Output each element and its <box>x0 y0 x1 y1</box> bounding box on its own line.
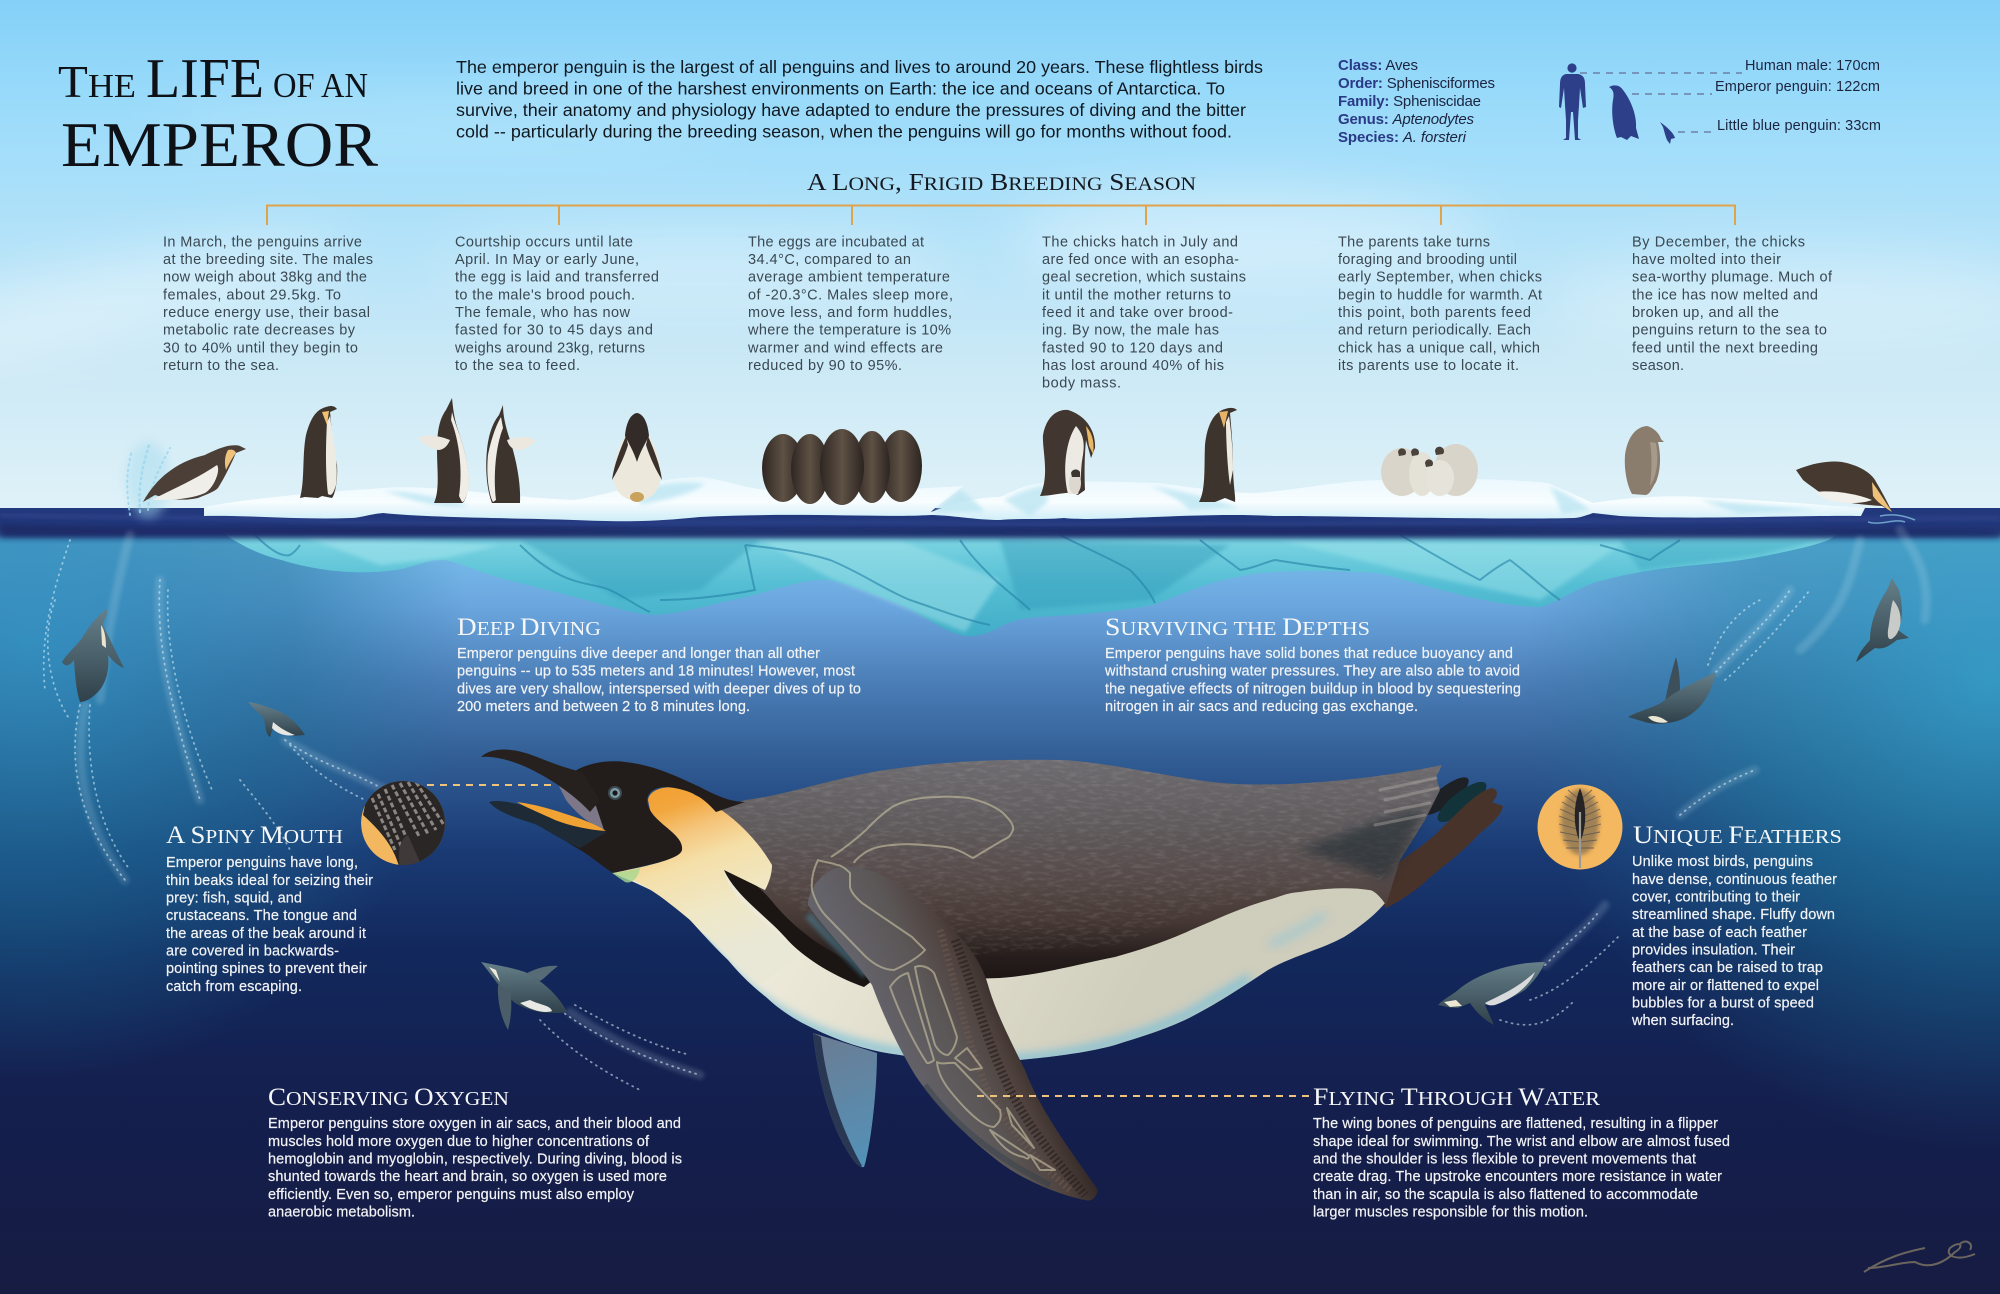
section: conserving oxygen: hemoglobin and myoglobin, respectively. During diving, blood is <box>268 1152 682 1168</box>
timeline text: March: In March, the penguins arrive <box>163 234 362 250</box>
height comparison chart <box>1559 58 1881 144</box>
timeline text: incubation <box>747 234 953 374</box>
background: clouds <box>0 94 2000 383</box>
intro text <box>456 57 1263 142</box>
dark water band at surface <box>0 500 2000 537</box>
back plumage <box>716 760 1442 982</box>
belly <box>613 860 1385 1062</box>
head <box>537 761 745 873</box>
section: conserving oxygen: CONSERVING OXYGEN <box>268 1084 509 1111</box>
penguin: incubating egg front view <box>612 413 662 502</box>
penguin chicks huddling <box>1381 444 1478 496</box>
bubble trails <box>44 530 1926 1090</box>
icon: feather detail circle <box>1538 784 1622 870</box>
timeline text: September: early September, when chicks <box>1338 270 1542 286</box>
iceberg cracks <box>255 535 1680 625</box>
penguin: courting pair left <box>418 398 469 503</box>
timeline text: July hatching: feed it and take over brood- <box>1042 305 1233 321</box>
timeline text: April to June: April. In May or early June, <box>455 252 639 268</box>
leader: flipper <box>977 1095 1310 1097</box>
penguin: standing male <box>300 406 337 498</box>
section: unique feathers: streamlined shape. Fluffy down <box>1632 907 1835 923</box>
chest and neck patch <box>613 787 800 985</box>
timeline text: December: penguins return to the sea to <box>1632 323 1827 339</box>
eye <box>608 786 622 800</box>
icon: human silhouette <box>1559 63 1586 140</box>
intro text: The emperor penguin is the largest of all penguins and lives to around 20 years. These flightless birds <box>456 57 1263 77</box>
timeline text: incubation: move less, and form huddles, <box>748 305 952 321</box>
timeline text: December: By December, the chicks <box>1632 234 1805 250</box>
timeline text: July hatching: geal secretion, which sustains <box>1042 270 1246 286</box>
swimming penguin: small left <box>248 702 305 737</box>
timeline text: incubation: where the temperature is 10% <box>747 323 951 339</box>
section: surviving the depths: withstand crushing water pressures. They are also able to avoid <box>1104 664 1520 680</box>
tail feather highlights <box>1375 778 1438 825</box>
timeline text: April to June: to the sea to feed. <box>455 358 580 374</box>
section: surviving the depths: the negative effects of nitrogen buildup in blood by sequestering <box>1105 681 1521 697</box>
icon: mouth spines detail circle <box>361 781 445 865</box>
section: deep diving: Emperor penguins dive deeper and longer than all other <box>457 646 820 662</box>
taxonomy list <box>1338 57 1495 146</box>
section: a spiny mouth: thin beaks ideal for seizing their <box>166 873 373 889</box>
timeline text: September: its parents use to locate it. <box>1338 358 1519 374</box>
taxonomy list: Species: A. forsteri <box>1338 129 1467 146</box>
leader: mouth <box>427 784 552 786</box>
height dashed leaders <box>1580 73 1742 132</box>
background: sky <box>0 0 2000 520</box>
title: EMPEROR <box>61 109 378 180</box>
timeline text: September: this point, both parents feed <box>1338 305 1531 321</box>
timeline text: April to June <box>454 234 659 374</box>
timeline text: July hatching: body mass. <box>1042 376 1121 392</box>
timeline text: September: The parents take turns <box>1338 234 1490 250</box>
timeline text: April to June: the egg is laid and transferred <box>455 270 659 286</box>
timeline text: December: have molted into their <box>1632 252 1781 268</box>
timeline text: July hatching: ing. By now, the male has <box>1042 323 1219 339</box>
section: unique feathers: more air or flattened to expel <box>1632 978 1819 994</box>
timeline text: incubation: 34.4°C, compared to an <box>748 252 911 268</box>
timeline text: July hatching: The chicks hatch in July and <box>1042 234 1238 250</box>
section: conserving oxygen: efficiently. Even so, emperor penguins must also employ <box>268 1187 635 1203</box>
timeline text: July hatching <box>1042 234 1246 392</box>
swimming penguin: top left <box>62 609 124 702</box>
timeline text: March: reduce energy use, their basal <box>163 305 370 321</box>
flipper <box>808 867 1098 1201</box>
taxonomy list: Family: Spheniscidae <box>1338 93 1481 110</box>
timeline text: September: chick has a unique call, which <box>1338 340 1540 356</box>
swimming penguin: far right <box>1856 578 1909 662</box>
section: unique feathers: at the base of each feather <box>1632 925 1807 941</box>
height labels: Little blue penguin: 33cm <box>1717 118 1881 134</box>
black wedge behind flipper <box>724 870 880 987</box>
swimming penguin: lower right <box>1438 962 1545 1025</box>
title: OF AN <box>273 66 368 105</box>
timeline text: December: season. <box>1632 358 1684 374</box>
section: flying through water: The wing bones of penguins are flattened, resulting in a flipper <box>1313 1116 1718 1132</box>
background: sea <box>0 520 2000 1294</box>
section: unique feathers: bubbles for a burst of speed <box>1632 996 1814 1012</box>
timeline text: July hatching: fasted 90 to 120 days and <box>1042 340 1223 356</box>
timeline text: incubation: average ambient temperature <box>748 270 950 286</box>
penguin: diving into sea right <box>1796 461 1892 512</box>
upper beak <box>481 749 600 812</box>
section: deep diving: DEEP DIVING <box>457 614 601 641</box>
section: flying through water: create drag. The upstroke encounters more resistance in water <box>1313 1169 1722 1185</box>
swimming penguin: upper right <box>1628 657 1716 724</box>
timeline text: incubation: warmer and wind effects are <box>747 340 943 356</box>
section: surviving the depths: Emperor penguins have solid bones that reduce buoyancy and <box>1105 646 1513 662</box>
taxonomy list: Class: Aves <box>1338 57 1418 74</box>
timeline text: December: broken up, and all the <box>1632 305 1779 321</box>
penguin: courting pair right <box>486 405 536 503</box>
timeline text: July hatching: has lost around 40% of his <box>1042 358 1224 374</box>
section: flying through water: shape ideal for swimming. The wrist and elbow are almost fused <box>1313 1134 1730 1150</box>
timeline text: September <box>1338 234 1542 374</box>
section: a spiny mouth: Emperor penguins have long, <box>166 855 358 871</box>
ice floe above water <box>204 477 1865 521</box>
timeline text: December: the ice has now melted and <box>1632 287 1818 303</box>
icon: emperor penguin silhouette <box>1609 85 1639 140</box>
ice relief shading <box>385 482 1820 516</box>
flipper bone outlines <box>812 797 1055 1170</box>
intro text: live and breed in one of the harshest environments on Earth: the ice and oceans of Antarctica. To <box>456 78 1225 98</box>
section: conserving oxygen: shunted towards the heart and brain, so oxygen is used more <box>268 1169 667 1185</box>
timeline text: September: and return periodically. Each <box>1338 323 1531 339</box>
section: a spiny mouth: A SPINY MOUTH <box>166 822 343 849</box>
intro text: survive, their anatomy and physiology have adapted to endure the pressures of diving and the bitter <box>456 100 1246 120</box>
penguin: standing departing parent <box>1199 408 1237 502</box>
tail feathers <box>1418 772 1492 828</box>
taxonomy list: Order: Sphenisciformes <box>1338 75 1495 92</box>
timeline text: July hatching: are fed once with an esopha- <box>1042 252 1239 268</box>
timeline bracket <box>267 206 1735 225</box>
timeline text: March: females, about 29.5kg. To <box>163 287 341 303</box>
feet <box>1378 788 1503 908</box>
timeline text: July hatching: it until the mother returns to <box>1042 287 1231 303</box>
section: flying through water <box>1313 1084 1730 1220</box>
section: unique feathers: have dense, continuous feather <box>1632 872 1837 888</box>
section: flying through water: FLYING THROUGH WATER <box>1313 1084 1601 1111</box>
section: deep diving: dives are very shallow, interspersed with deeper dives of up to <box>457 681 861 697</box>
section: unique feathers <box>1631 822 1842 1029</box>
section: conserving oxygen: Emperor penguins store oxygen in air sacs, and their blood and <box>268 1116 681 1132</box>
splash at right entry point <box>1868 515 1915 523</box>
timeline text: March: now weigh about 38kg and the <box>163 270 367 286</box>
timeline text: September: begin to huddle for warmth. At <box>1338 287 1542 303</box>
icon: little blue penguin silhouette <box>1660 122 1675 144</box>
side glows in the water <box>0 520 2000 1220</box>
section: conserving oxygen <box>268 1084 682 1220</box>
iceberg underwater <box>215 525 1850 636</box>
section: flying through water: than in air, so the scapula is also flattened to accommodate <box>1313 1187 1698 1203</box>
foot fin behind body <box>813 1033 877 1167</box>
section: conserving oxygen: muscles hold more oxygen due to higher concentrations of <box>268 1134 650 1150</box>
title: LIFE <box>146 48 264 110</box>
section: unique feathers: Unlike most birds, penguins <box>1632 854 1813 870</box>
section: a spiny mouth: the areas of the beak around it <box>166 926 366 942</box>
green throat tint <box>612 868 640 882</box>
timeline text: incubation: reduced by 90 to 95%. <box>748 358 902 374</box>
timeline text: December: feed until the next breeding <box>1632 340 1818 356</box>
taxonomy list: Genus: Aptenodytes <box>1338 111 1474 128</box>
section: a spiny mouth: crustaceans. The tongue and <box>166 908 357 924</box>
section: a spiny mouth <box>166 822 373 995</box>
section: a spiny mouth: catch from escaping. <box>166 979 302 995</box>
title: THE <box>58 56 136 107</box>
lower beak <box>489 801 607 848</box>
section: flying through water: and the shoulder is less flexible to prevent movements that <box>1313 1152 1696 1168</box>
section: surviving the depths: nitrogen in air sacs and reducing gas exchange. <box>1105 699 1418 715</box>
timeline text: March: 30 to 40% until they begin to <box>163 340 358 356</box>
section: flying through water: larger muscles responsible for this motion. <box>1313 1204 1588 1220</box>
timeline text: December <box>1632 234 1833 374</box>
timeline text: September: foraging and brooding until <box>1338 252 1517 268</box>
timeline text: March <box>163 234 373 374</box>
timeline text: April to June: The female, who has now <box>455 305 631 321</box>
timeline text: April to June: to the male's brood pouch. <box>455 287 635 303</box>
height labels: Emperor penguin: 122cm <box>1715 79 1880 95</box>
main emperor penguin illustration <box>481 749 1503 1201</box>
section: deep diving <box>457 614 861 715</box>
iceberg shading facets <box>300 535 1820 632</box>
timeline text: December: sea-worthy plumage. Much of <box>1632 270 1833 286</box>
height labels <box>1715 58 1881 134</box>
section: unique feathers: provides insulation. Their <box>1632 942 1795 958</box>
splash at left diving point <box>126 442 170 518</box>
intro text: cold -- particularly during the breeding season, when the penguins will go for months without food. <box>456 122 1232 142</box>
section: surviving the depths <box>1104 614 1521 715</box>
timeline text: March: return to the sea. <box>163 358 279 374</box>
section: a spiny mouth: are covered in backwards- <box>166 944 339 960</box>
section: unique feathers: when surfacing. <box>1631 1013 1734 1029</box>
orange beak plate <box>517 802 606 831</box>
timeline text: April to June: weighs around 23kg, returns <box>454 340 645 356</box>
penguin: molting juvenile <box>1625 426 1664 495</box>
artist signature <box>1864 1242 1975 1272</box>
penguin: leaping onto ice <box>143 445 246 502</box>
timeline text: March: at the breeding site. The males <box>163 252 373 268</box>
section: unique feathers: feathers can be raised to trap <box>1632 960 1823 976</box>
section: a spiny mouth: pointing spines to prevent their <box>166 961 367 977</box>
penguin huddle <box>762 429 922 505</box>
section heading: breeding season: A L ONG, FRIGID BREEDING SEASON <box>807 170 1196 196</box>
timeline text: incubation: The eggs are incubated at <box>748 234 924 250</box>
section: conserving oxygen: anaerobic metabolism. <box>268 1204 415 1220</box>
height labels: Human male: 170cm <box>1745 58 1880 74</box>
penguin: parent with chick <box>1040 410 1095 496</box>
mouth interior <box>556 780 604 830</box>
swimming penguin: lower left <box>481 962 567 1030</box>
section: unique feathers: UNIQUE FEATHERS <box>1633 822 1842 849</box>
timeline text: March: metabolic rate decreases by <box>163 323 356 339</box>
section: deep diving: penguins -- up to 535 meters and 18 minutes! However, most <box>457 664 855 680</box>
section: deep diving: 200 meters and between 2 to 8 minutes long. <box>457 699 750 715</box>
timeline text: April to June: Courtship occurs until late <box>455 234 633 250</box>
section: unique feathers: cover, contributing to their <box>1632 890 1800 906</box>
section: a spiny mouth: prey: fish, squid, and <box>166 890 302 906</box>
timeline text: incubation: of -20.3°C. Males sleep more, <box>748 287 953 303</box>
title <box>58 48 378 180</box>
timeline text: April to June: fasted for 30 to 45 days and <box>455 323 653 339</box>
section: surviving the depths: SURVIVING THE DEPTHS <box>1105 614 1370 641</box>
